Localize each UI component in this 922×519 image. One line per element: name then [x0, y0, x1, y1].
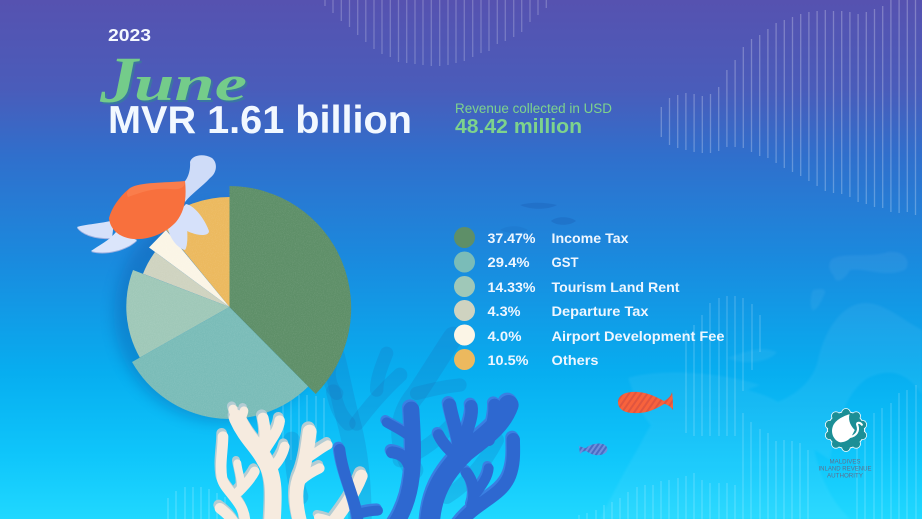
white coral [219, 406, 361, 519]
logo badge [825, 408, 867, 452]
month script: une [136, 57, 249, 113]
slice: airport development fee 4.0% [149, 230, 230, 307]
slice: tourism land rent 14.33% [126, 270, 230, 358]
slice: departure tax 4.3% [143, 252, 230, 307]
logo text [818, 458, 872, 480]
month script: J [101, 46, 142, 119]
legend row: departure tax [454, 300, 649, 321]
logo: Maldives Inland Revenue Authority [818, 408, 872, 480]
decorative line pattern: top centre [325, 0, 546, 66]
legend row: airport development fee [454, 324, 725, 346]
legend row: tourism land rent: 14.33% [488, 279, 536, 295]
legend row: tourism land rent [454, 276, 680, 297]
slice: income tax 37.47% [230, 186, 351, 394]
slice: others 10.5% [160, 197, 230, 307]
year: 2023 [108, 25, 151, 45]
legend row: income tax: 37.47% [488, 230, 536, 246]
pie chart [114, 186, 351, 422]
decorative line pattern: lower left [168, 395, 324, 519]
legend row: departure tax: 4.3% [488, 303, 521, 319]
legend row: income tax [454, 227, 629, 248]
ghost coral silhouette [292, 337, 497, 519]
legend row: others [454, 349, 599, 370]
decorative line pattern: top right [661, 0, 916, 215]
decorative line pattern: lower right [579, 296, 916, 519]
legend row: tourism land rent: Tourism Land Rent [552, 279, 680, 295]
ghost wave shapes [600, 252, 922, 519]
revenue in USD [455, 101, 612, 138]
month script: une [134, 55, 247, 111]
blue fish [579, 444, 607, 455]
slice: GST 29.4% [132, 307, 308, 419]
legend [454, 227, 725, 370]
legend row: airport development fee: Airport Development Fee [552, 328, 725, 344]
headline revenue: MVR 1.61 billion [108, 99, 412, 142]
logo text: MALDIVES [830, 458, 861, 466]
legend row: departure tax: Departure Tax [552, 303, 649, 319]
orange fish [618, 392, 673, 413]
revenue in USD: Revenue collected in USD [455, 101, 612, 116]
pie shadow [114, 206, 330, 422]
legend row: others: 10.5% [488, 352, 529, 368]
logo text: AUTHORITY [827, 472, 864, 480]
legend row: GST: GST [552, 254, 579, 270]
legend row: income tax: Income Tax [552, 230, 629, 246]
legend row: airport development fee: 4.0% [488, 328, 522, 344]
legend row: others: Others [552, 352, 599, 368]
ghost fish [500, 203, 576, 233]
month script [99, 44, 249, 119]
revenue in USD: 48.42 million [455, 116, 582, 138]
logo text: INLAND REVENUE [818, 466, 872, 472]
blue coral [338, 403, 513, 519]
legend row: GST: 29.4% [488, 254, 530, 270]
pie grain [126, 186, 351, 419]
legend row: GST [454, 252, 579, 272]
icon: sea turtle [77, 155, 216, 254]
month script: J [99, 44, 140, 117]
